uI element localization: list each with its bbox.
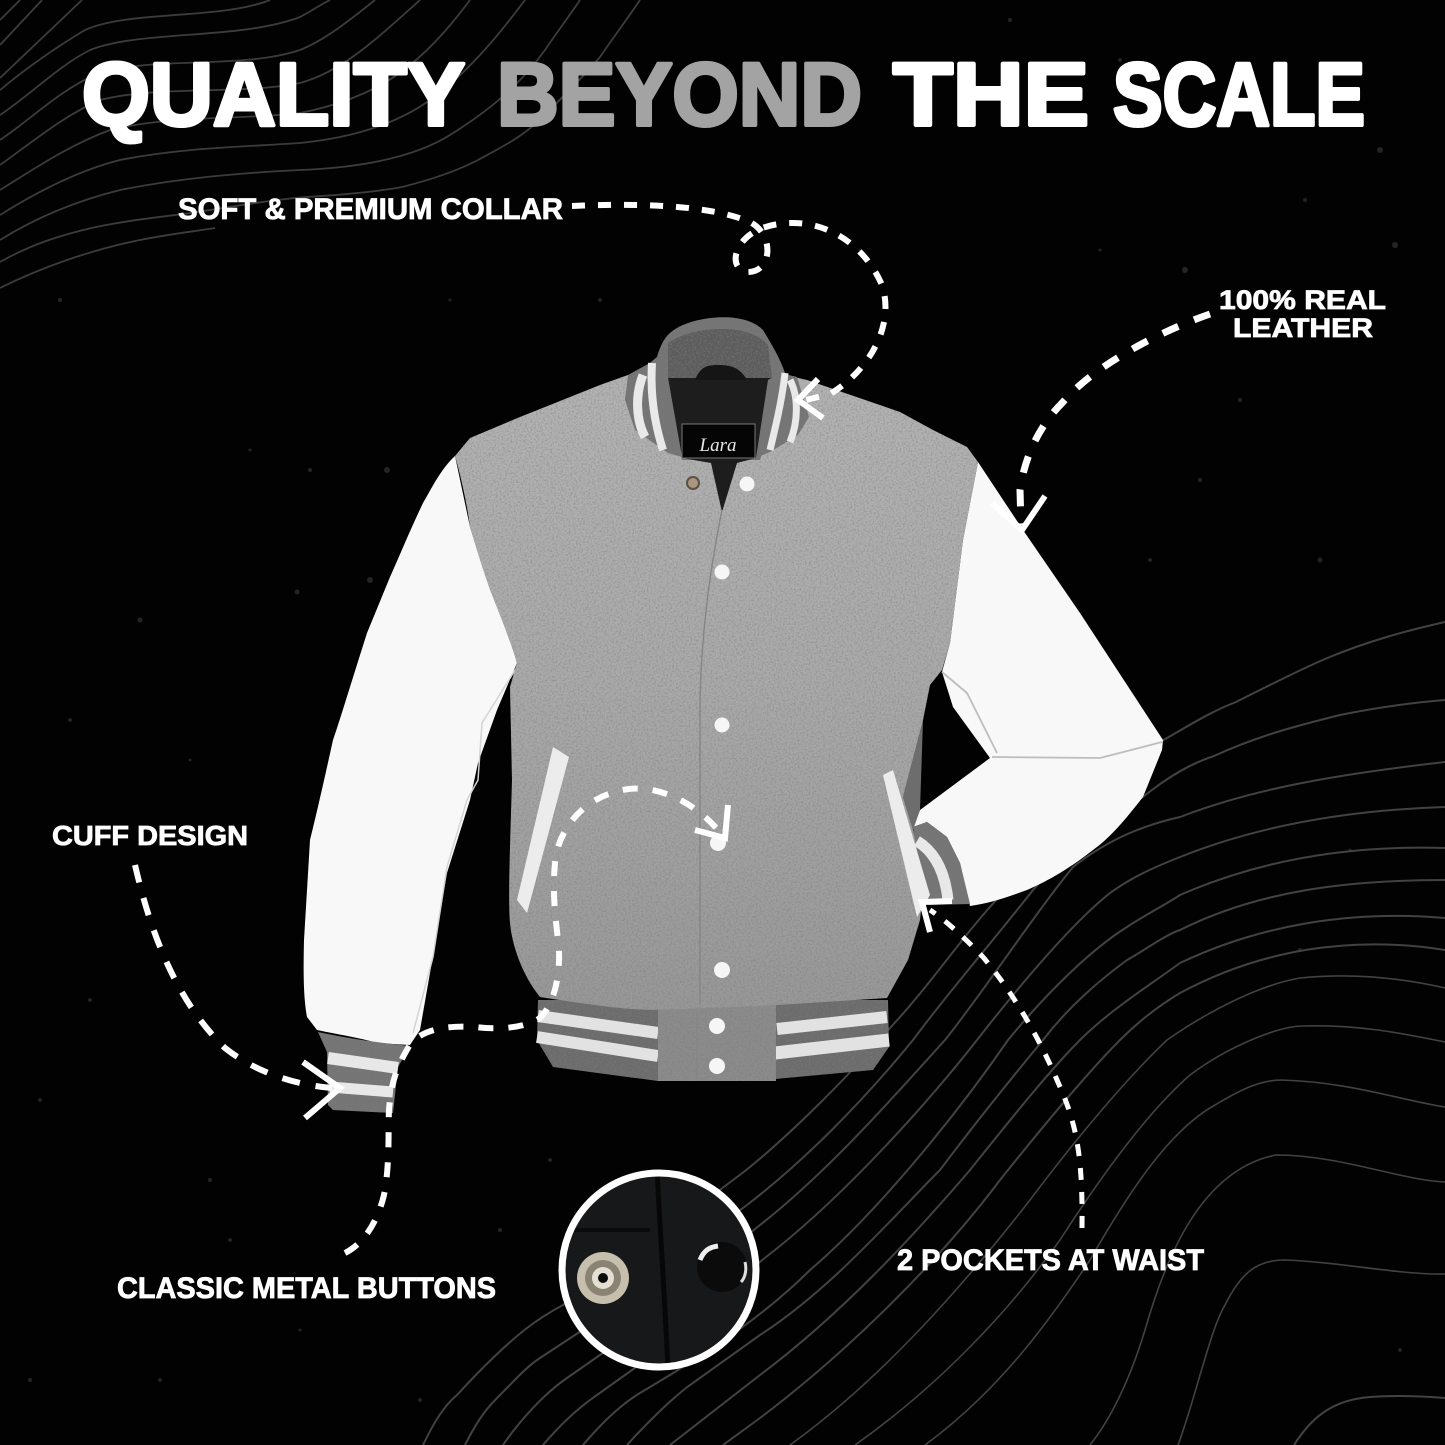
waist rib	[537, 1000, 889, 1081]
brand label: Lara	[699, 435, 736, 456]
inset: close-up of buttons	[562, 1170, 756, 1370]
callout: 100% real leather: LEATHER	[1233, 313, 1373, 343]
title: QUALITY	[82, 44, 465, 144]
callout: 2 pockets at waist	[897, 901, 1204, 1277]
callout: classic metal buttons: CLASSIC METAL BUTTONS	[117, 1272, 496, 1305]
title: BEYOND	[497, 44, 862, 144]
background contour lines, lower right	[423, 622, 1445, 1445]
inner collar rib	[668, 329, 772, 378]
collar back rib	[650, 317, 785, 460]
callout: classic metal buttons	[117, 789, 728, 1305]
jacket	[304, 317, 1163, 1113]
callout: cuff design	[52, 820, 340, 1118]
callout: cuff design: CUFF DESIGN	[52, 820, 248, 851]
title	[82, 44, 1365, 144]
darker back panel beside right pocket	[903, 720, 923, 830]
left cuff	[318, 1032, 410, 1113]
title: SCALE	[1113, 44, 1365, 144]
right pocket	[883, 770, 930, 917]
left sleeve	[304, 456, 517, 1045]
icon: black snap	[697, 1242, 747, 1292]
snap buttons	[709, 476, 754, 1074]
callout: soft and premium collar	[178, 193, 885, 418]
background contour lines, upper left	[0, 0, 640, 288]
callout: 100% real leather	[992, 285, 1386, 530]
inner lining	[668, 378, 772, 512]
left pocket	[517, 747, 569, 913]
callout: soft and premium collar: SOFT & PREMIUM COLLAR	[178, 193, 563, 226]
left collar rib	[625, 357, 682, 457]
wool body	[455, 360, 978, 1010]
right sleeve	[913, 462, 1163, 906]
leather hanger loop	[695, 365, 747, 380]
metal snap	[687, 477, 699, 489]
icon: silver rivet	[577, 1252, 629, 1304]
title: THE	[893, 44, 1089, 144]
callout: 2 pockets at waist: 2 POCKETS AT WAIST	[897, 1244, 1204, 1277]
brand label	[682, 424, 755, 458]
right collar rib	[756, 373, 809, 458]
placket seam	[697, 510, 722, 1080]
callout: 100% real leather: 100% REAL	[1219, 285, 1386, 315]
right cuff	[913, 822, 970, 905]
